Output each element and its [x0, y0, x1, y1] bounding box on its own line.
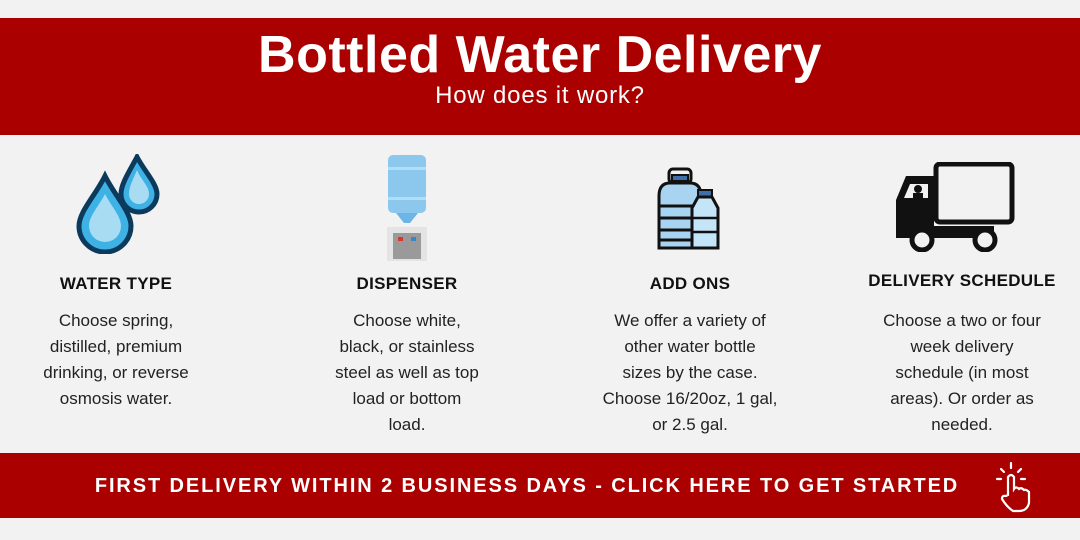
column: dispenser: Choose white, [353, 311, 461, 330]
column: dispenser: load. [389, 415, 425, 434]
column: delivery schedule: areas). Or order as [890, 389, 1034, 408]
icon: pointer hand [996, 462, 1030, 512]
column: water type: distilled, premium [50, 337, 182, 356]
column: delivery schedule: Choose a two or four [883, 311, 1041, 330]
icon: water dispenser [387, 155, 427, 261]
header band [0, 18, 1080, 135]
column: water type: WATER TYPE [60, 274, 172, 293]
column: dispenser: black, or stainless [339, 337, 475, 356]
column: delivery schedule: DELIVERY SCHEDULE [868, 271, 1056, 290]
column: dispenser: DISPENSER [357, 274, 457, 293]
column: delivery schedule [868, 271, 1056, 434]
column: add ons: Choose 16/20oz, 1 gal, [603, 389, 777, 408]
column: water type: drinking, or reverse [43, 363, 189, 382]
column: add ons: We offer a variety of [614, 311, 766, 330]
column: delivery schedule: week delivery [910, 337, 1014, 356]
title: Bottled Water Delivery [258, 26, 822, 84]
column: delivery schedule: needed. [931, 415, 993, 434]
icon: delivery truck [896, 162, 1014, 252]
subtitle: How does it work? [435, 82, 645, 109]
column: dispenser: load or bottom [353, 389, 461, 408]
column: dispenser: steel as well as top [335, 363, 479, 382]
column: water type: osmosis water. [60, 389, 172, 408]
column: add ons [603, 274, 777, 434]
column: add ons: or 2.5 gal. [652, 415, 728, 434]
call to action text: FIRST DELIVERY WITHIN 2 BUSINESS DAYS - CLICK HERE TO GET STARTED [95, 475, 959, 497]
column: add ons: sizes by the case. [622, 363, 758, 382]
footer band [0, 453, 1080, 518]
column: add ons: ADD ONS [650, 274, 730, 293]
column: water type [43, 274, 189, 408]
icon: bottles [658, 168, 720, 250]
icon: water drops [76, 154, 160, 254]
column: water type: Choose spring, [59, 311, 173, 330]
column: add ons: other water bottle [624, 337, 756, 356]
column: dispenser [335, 274, 479, 434]
column: delivery schedule: schedule (in most [895, 363, 1029, 382]
